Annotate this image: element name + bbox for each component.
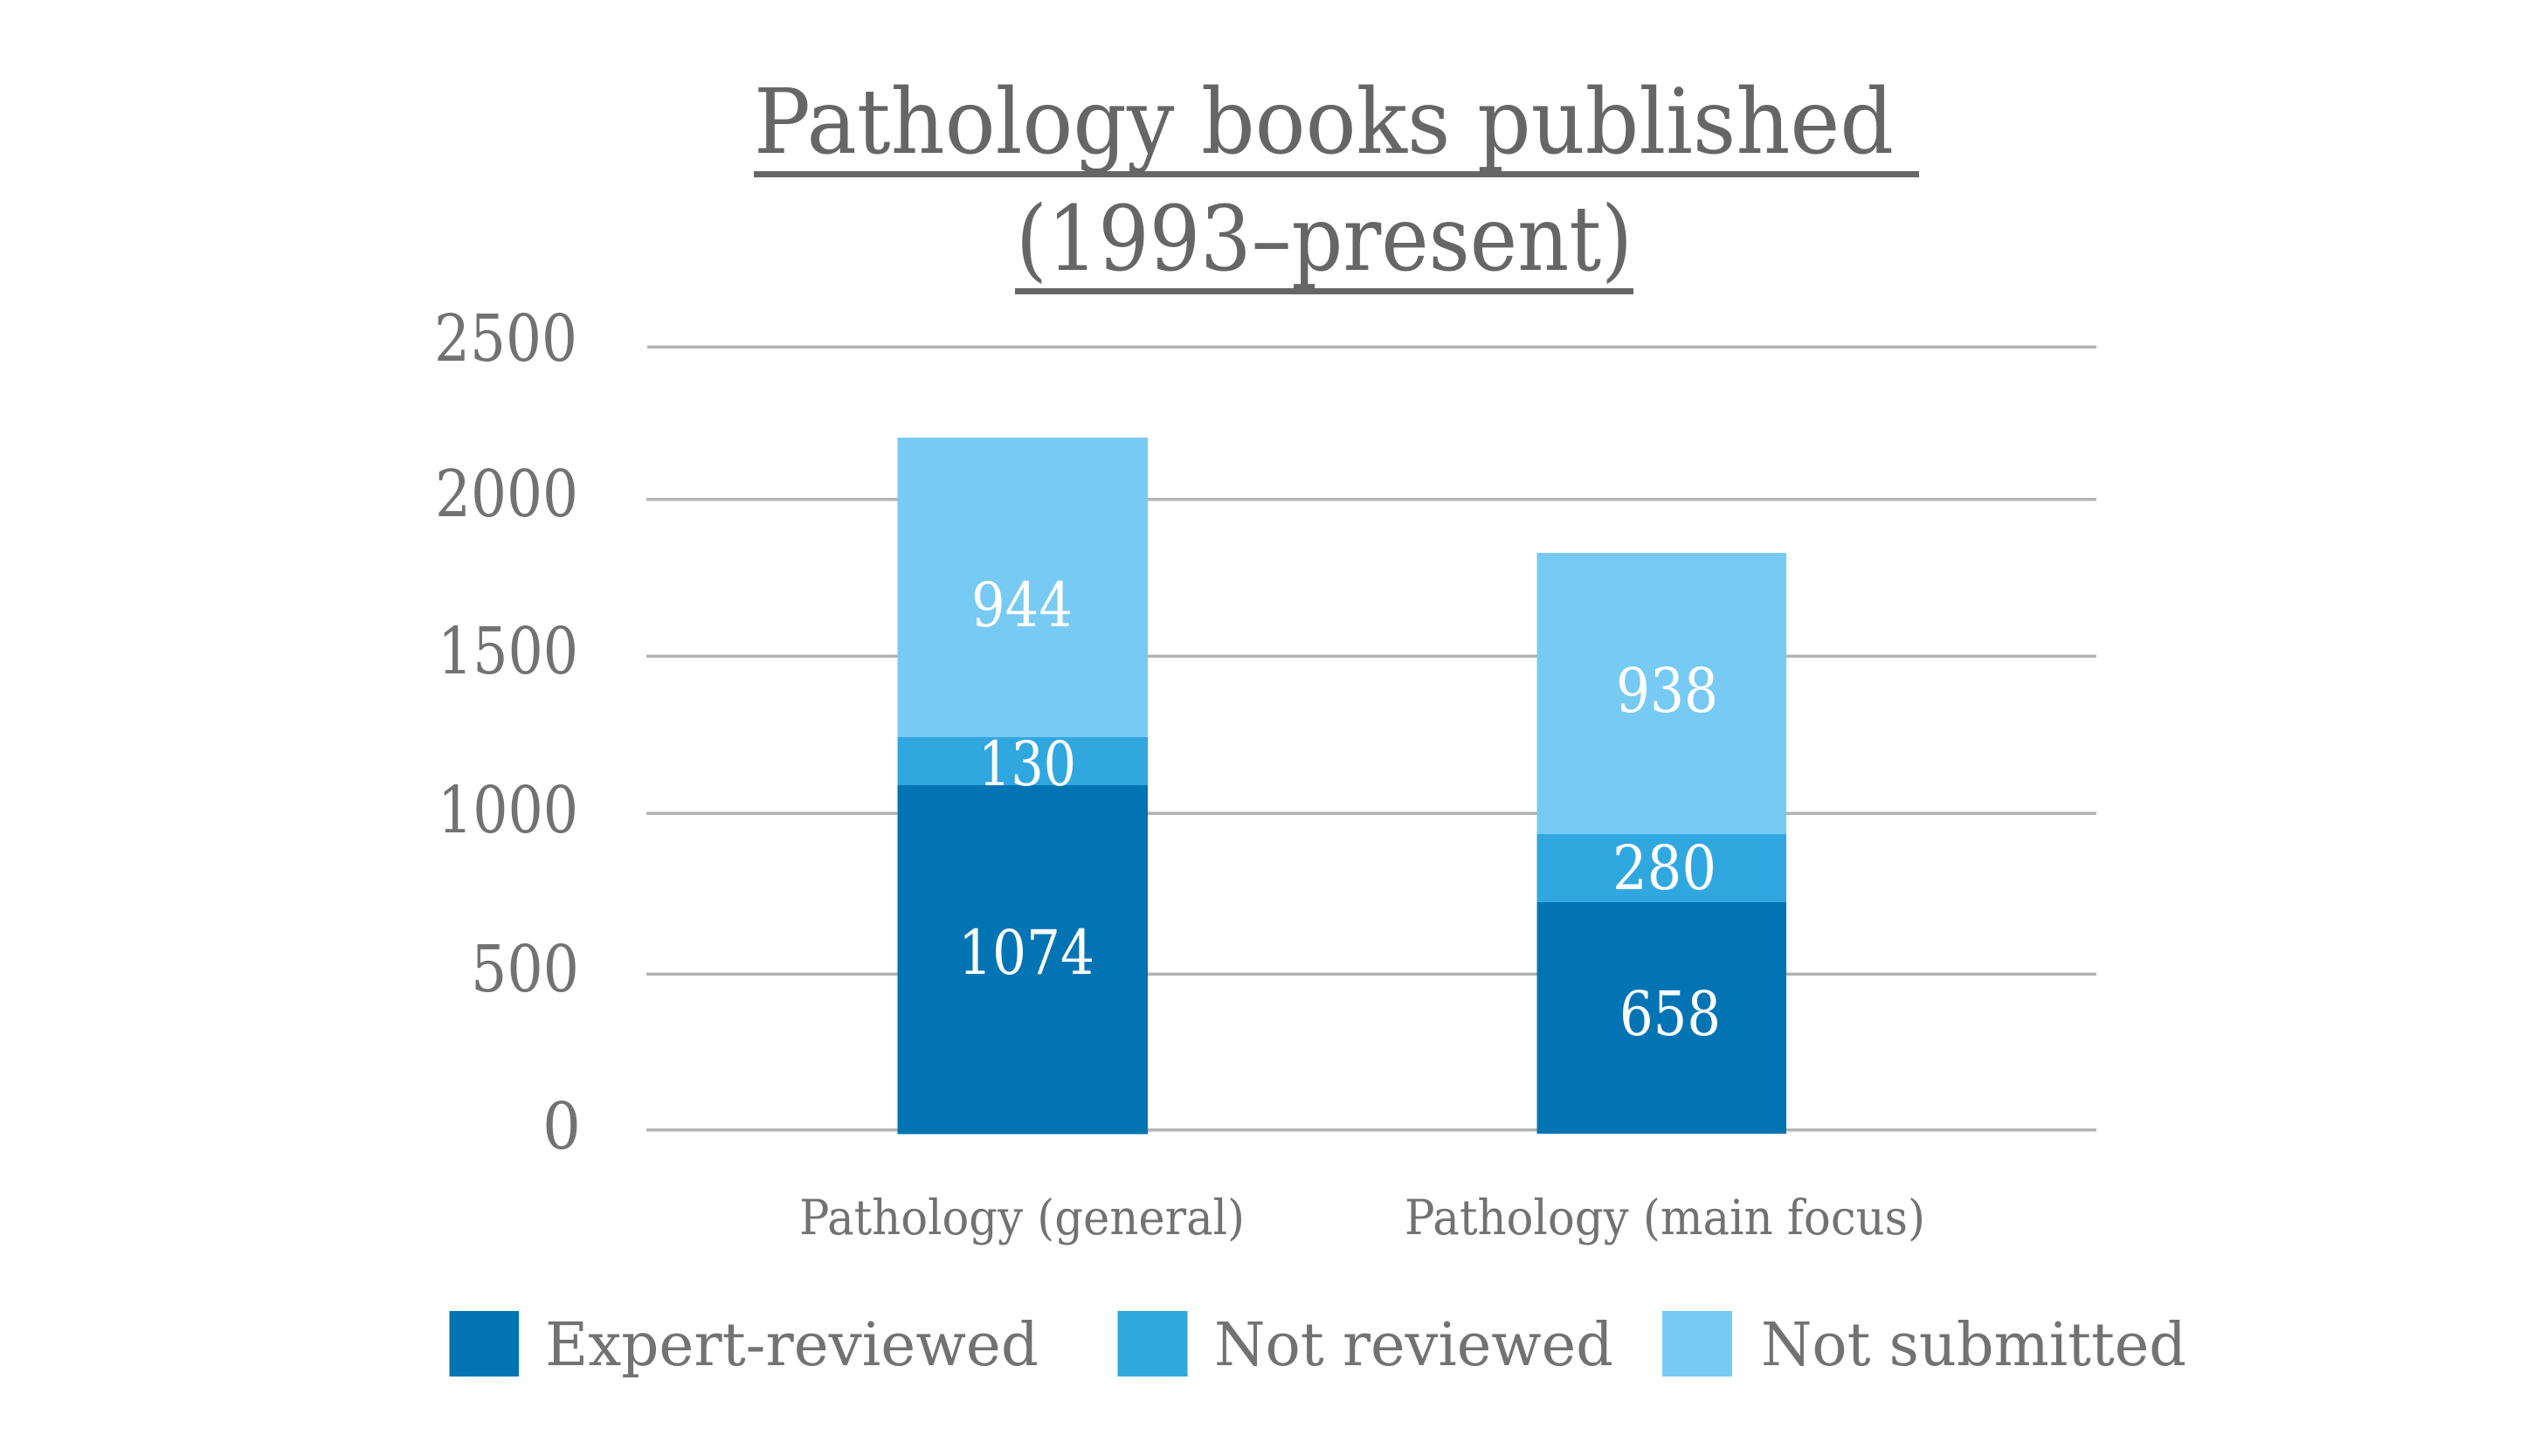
y axis labels: 0: [542, 1089, 581, 1164]
y axis labels: 1500: [438, 614, 578, 689]
bar: Pathology (main focus): 280: [1612, 832, 1716, 904]
y axis labels: 1000: [438, 773, 578, 848]
title: [754, 70, 1919, 294]
legend: Expert-reviewed: [545, 1310, 1039, 1380]
title: (1993–present): [1016, 187, 1633, 292]
category labels: Pathology (general): [799, 1190, 1245, 1246]
y axis labels: [434, 301, 581, 1164]
y axis labels: 2500: [434, 301, 577, 376]
legend: Not reviewed: [1214, 1310, 1613, 1380]
bar: Pathology (general): [898, 438, 1148, 1134]
bar: Pathology (main focus): 658: [1619, 978, 1721, 1050]
category labels: Pathology (main focus): [1405, 1190, 1925, 1246]
legend: [449, 1310, 2186, 1380]
gridlines: [646, 346, 2096, 1132]
category labels: [799, 1190, 1925, 1246]
bar: Pathology (main focus): [1537, 553, 1786, 1134]
y axis labels: 2000: [435, 457, 578, 532]
title: Pathology books published: [754, 70, 1894, 175]
bar: Pathology (general): 944: [971, 569, 1073, 641]
legend: Not submitted: [1761, 1310, 2186, 1380]
bar: Pathology (general): 1074: [958, 917, 1094, 989]
y axis labels: 500: [471, 932, 579, 1007]
bar: Pathology (main focus): 938: [1616, 655, 1718, 727]
bar: Pathology (general): 130: [978, 728, 1076, 800]
